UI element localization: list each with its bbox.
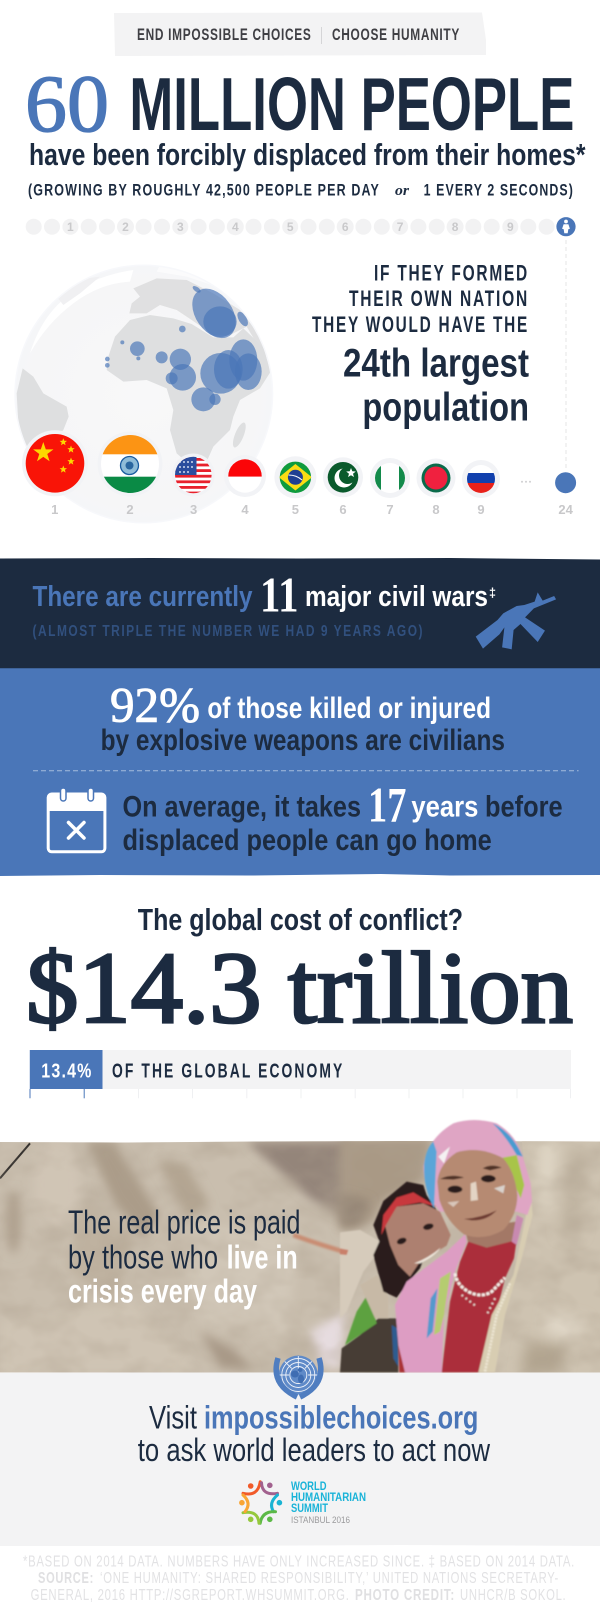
call to action text: Visit	[149, 1399, 197, 1435]
rank labels: 1	[51, 502, 58, 517]
flag row	[22, 430, 576, 517]
footnotes: SOURCE:	[38, 1570, 94, 1587]
flag: Indonesia	[228, 459, 262, 492]
rank 24 marker	[555, 472, 576, 493]
logo: World Humanitarian Summit: HUMANITARIAN	[291, 1492, 366, 1504]
rank labels: 4	[241, 502, 249, 517]
right side curtain	[340, 1138, 600, 1375]
panel: call to action: impossiblechoices.org	[204, 1399, 478, 1435]
flag: Brazil	[280, 462, 312, 493]
dot timeline: 8	[452, 220, 459, 234]
footnotes	[23, 1554, 575, 1604]
big girl face	[437, 1150, 517, 1237]
rank labels: 9	[477, 502, 485, 517]
civil wars lead text: There are currently	[32, 581, 252, 613]
flag: Bangladesh	[422, 464, 450, 492]
dot timeline: 3	[177, 220, 184, 234]
panel: civil wars: ‡	[489, 585, 496, 600]
footnotes: PHOTO CREDIT:	[355, 1587, 455, 1604]
logo: World Humanitarian Summit: SUMMIT	[291, 1503, 328, 1515]
neck	[465, 1222, 517, 1248]
flag: Nigeria	[375, 463, 405, 493]
panel: civilians and displacement	[0, 668, 600, 876]
footnotes: GENERAL, 2016 HTTP://SGREPORT.WHSUMMIT.ORG.	[31, 1587, 350, 1604]
flag halos	[22, 430, 500, 498]
panel: civilians and displacement: before	[485, 791, 563, 824]
headline number 60: 60	[25, 58, 109, 149]
globe map	[14, 264, 273, 524]
scarf drape	[395, 1234, 467, 1372]
civil wars footnote: (ALMOST TRIPLE THE NUMBER WE HAD 9 YEARS AGO)	[32, 623, 424, 640]
logo: World Humanitarian Summit: WORLD	[291, 1481, 326, 1493]
rank labels: 6	[339, 502, 347, 517]
rank labels: 5	[292, 502, 299, 517]
headline	[25, 58, 574, 149]
dot timeline	[26, 217, 576, 236]
logo: World Humanitarian Summit: ISTANBUL 2016	[291, 1515, 350, 1525]
photo caption: by those who	[68, 1238, 218, 1275]
photo: children in tent	[0, 1120, 600, 1380]
nation text	[312, 261, 529, 430]
panel: civil wars	[0, 558, 600, 670]
panel: call to action: to ask world leaders to act now	[138, 1432, 491, 1468]
rank labels: 8	[432, 502, 440, 517]
children	[340, 1120, 533, 1372]
small girl face	[385, 1203, 451, 1277]
number 92%: 92%	[110, 677, 200, 733]
panel: call to action	[0, 1356, 600, 1546]
dot timeline: 9	[507, 220, 514, 234]
refugee bubbles	[105, 280, 262, 411]
panel: civilians and displacement: by explosive weapons are civilians	[101, 724, 505, 757]
economy bar chart	[30, 1050, 571, 1098]
flag: India	[101, 435, 159, 493]
icon: rifle	[476, 592, 556, 649]
number 17: 17	[368, 777, 406, 833]
rank labels: 2	[126, 502, 134, 517]
photo caption: live in	[227, 1238, 298, 1275]
flag: Pakistan	[328, 462, 358, 493]
tent folds	[0, 1142, 353, 1373]
big girl dress	[442, 1240, 517, 1372]
small girl hair	[373, 1182, 440, 1298]
blue under-layer	[392, 1325, 398, 1367]
tagline banner	[114, 12, 486, 56]
photo caption: The real price is paid	[68, 1203, 300, 1240]
tagline left: END IMPOSSIBLE CHOICES	[137, 25, 312, 44]
icon: person marker	[556, 217, 576, 236]
dot timeline: 7	[397, 220, 404, 234]
tagline right: CHOOSE HUMANITY	[332, 25, 460, 44]
civil wars text: major civil wars	[305, 581, 488, 613]
bar value: 13.4%	[41, 1060, 93, 1082]
nation text: IF THEY FORMED	[374, 261, 529, 286]
number 11: 11	[260, 567, 298, 623]
south america land	[16, 368, 68, 446]
time to home text: On average, it takes	[122, 791, 361, 824]
dot timeline: 1	[67, 220, 74, 234]
europe land	[129, 278, 267, 360]
nation text: population	[362, 386, 529, 430]
headscarf	[423, 1120, 532, 1215]
photo caption	[68, 1203, 300, 1310]
curtain trim	[478, 1192, 533, 1372]
icon: calendar	[48, 788, 105, 852]
rank labels: 3	[190, 502, 197, 517]
24th largest callout: 24th largest	[343, 342, 529, 386]
dot timeline: 4	[232, 220, 239, 234]
left bundle	[340, 1230, 381, 1318]
flag: USA	[175, 456, 213, 494]
flag: Russia	[467, 465, 495, 493]
dot timeline: 5	[287, 220, 294, 234]
cost figure: $14.3 trillion	[26, 932, 573, 1045]
rank labels	[51, 502, 574, 517]
panel: civilians and displacement: displaced people can go home	[122, 824, 492, 857]
ellipsis	[521, 481, 531, 483]
panel: civilians and displacement: years	[411, 791, 478, 824]
icon: UN emblem	[276, 1356, 321, 1397]
logo: World Humanitarian Summit	[239, 1481, 366, 1525]
growth rate line: (GROWING BY ROUGHLY 42,500 PEOPLE PER DAY	[28, 182, 380, 200]
photo caption: crisis every day	[68, 1273, 257, 1310]
africa land	[107, 315, 271, 465]
dashed connector	[565, 240, 567, 470]
dot timeline: 2	[122, 220, 129, 234]
polar ice	[30, 270, 133, 353]
rank labels: 7	[386, 502, 394, 517]
growth rate line: or	[395, 183, 409, 199]
civilians text: of those killed or injured	[207, 692, 491, 725]
necklace	[455, 1273, 505, 1295]
nation text: THEIR OWN NATION	[349, 286, 529, 311]
rank labels: 24	[558, 502, 574, 517]
bar label: OF THE GLOBAL ECONOMY	[112, 1060, 344, 1082]
dot timeline: 6	[342, 220, 349, 234]
madagascar	[233, 422, 246, 448]
cost question: The global cost of conflict?	[138, 902, 463, 937]
flag: China	[24, 432, 86, 494]
